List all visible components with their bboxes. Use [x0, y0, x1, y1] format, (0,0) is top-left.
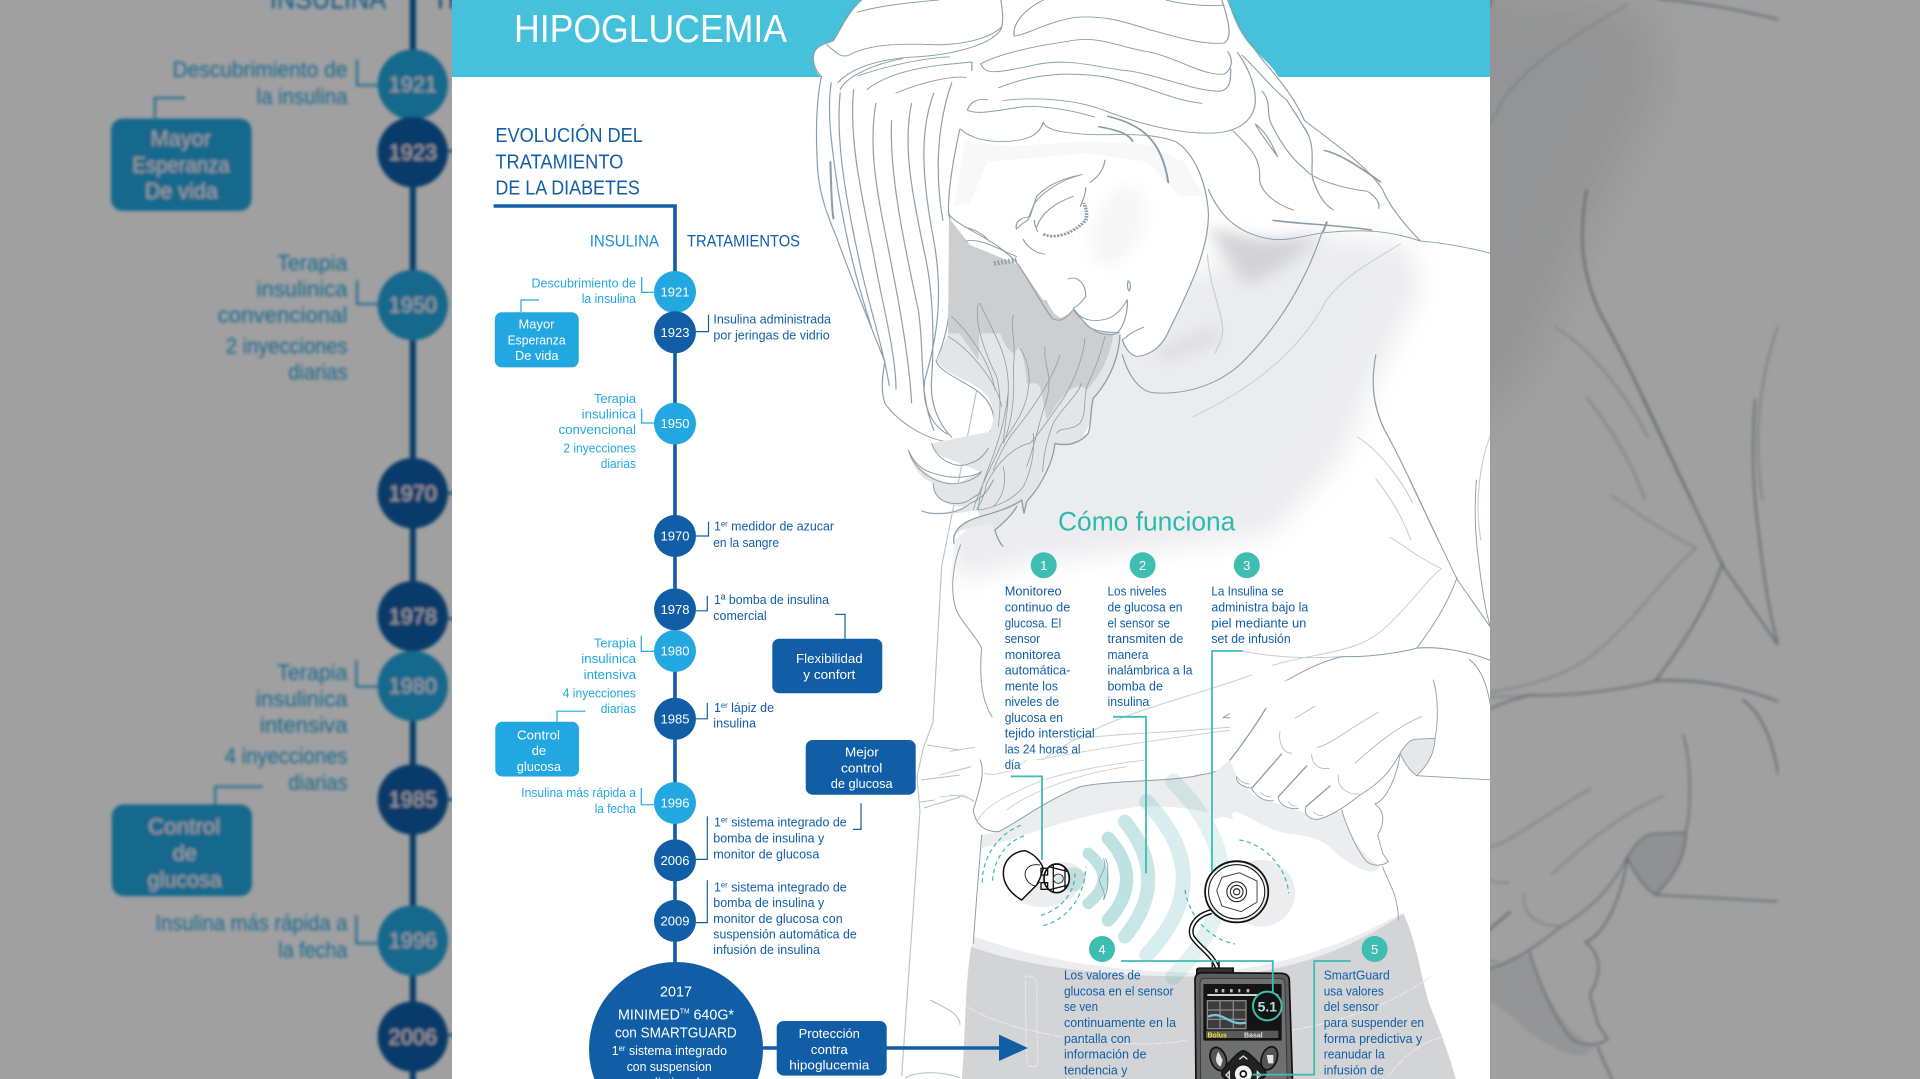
blurred enlarged background of the poster: 1923	[389, 140, 437, 165]
step 3: La Insulina se	[1211, 584, 1284, 599]
step 2: Los niveles	[1108, 584, 1167, 599]
step 2: 2	[1139, 558, 1146, 573]
blurred enlarged background of the poster: Terapia	[277, 251, 348, 276]
step 4: tendencia y	[1064, 1062, 1128, 1077]
signal waves	[1061, 782, 1222, 977]
node: 2017 minimed 640g: sistema integrado	[625, 1043, 727, 1058]
treatment labels: infusión de insulina	[713, 942, 821, 957]
box: control de glucosa	[495, 722, 579, 776]
year nodes: 1980	[661, 644, 689, 658]
header band	[452, 0, 1490, 77]
insulin labels: la fecha	[595, 801, 637, 816]
box: mejor control de glucosa	[806, 740, 916, 795]
step 1: glucosa. El	[1005, 615, 1061, 630]
blurred enlarged background of the poster: la insulina	[257, 84, 348, 109]
blurred enlarged background of the poster: insulinica	[257, 276, 348, 301]
box: mayor esperanza de vida	[495, 312, 579, 367]
blurred enlarged background of the poster: convencional	[218, 302, 348, 327]
pants stitching	[968, 976, 1441, 1076]
arrow to how-it-works	[763, 1035, 1028, 1061]
insulin pump	[1195, 960, 1293, 1079]
step 5: para suspender en	[1324, 1015, 1424, 1030]
pump screen readouts	[1208, 998, 1277, 1040]
column heading: tratamientos: TRATAMIENTOS	[687, 232, 800, 250]
treatment labels: 1	[714, 519, 721, 534]
step 4: pantalla con	[1064, 1031, 1131, 1046]
box: protección contra hipoglucemia: hipoglucemia	[789, 1057, 870, 1072]
heading: evolución del tratamiento: DE LA DIABETES	[495, 178, 640, 200]
blurred enlarged background of the poster: 1950	[389, 292, 437, 317]
insulin labels: insulinica	[581, 651, 637, 666]
year nodes: 1978	[661, 602, 689, 617]
blurred enlarged background of the poster: 1970	[389, 481, 437, 506]
blurred enlarged background of the poster: Descubrimiento de	[172, 57, 347, 82]
blurred enlarged background of the poster: 1978	[389, 604, 437, 629]
heading: evolución del tratamiento: EVOLUCIÓN DEL	[495, 124, 643, 147]
step 4: Los valores de	[1064, 968, 1140, 983]
insulin labels: 4 inyecciones	[563, 685, 636, 700]
step 1: las 24 horas al	[1005, 741, 1081, 756]
insulin labels: la insulina	[582, 291, 637, 306]
box: control de glucosa: glucosa	[517, 759, 562, 774]
neck, collar and shoulder	[1122, 189, 1438, 540]
insulin labels: diarias	[601, 456, 636, 471]
step 4: 4	[1098, 942, 1106, 957]
torso, belly and pants	[950, 480, 1490, 1079]
column heading: insulina: INSULINA	[590, 232, 660, 250]
blurred enlarged background of the poster: 4 inyecciones	[225, 744, 348, 769]
treatment labels: bomba de insulina y	[713, 830, 825, 846]
box: mayor esperanza de vida: Mayor	[518, 317, 555, 332]
blurred enlarged background of the poster: insulinica	[256, 686, 348, 711]
step 5: del sensor	[1324, 999, 1379, 1014]
year nodes: 2009	[661, 913, 689, 928]
heading: evolución del tratamiento: TRATAMIENTO	[495, 151, 623, 173]
node: 2017 minimed 640g: 2017	[660, 984, 692, 1000]
step 5: usa valores	[1324, 983, 1384, 998]
blurred enlarged background of the poster: 2 inyecciones	[226, 333, 348, 358]
step 1: sensor	[1005, 631, 1041, 646]
neck shadow	[1208, 227, 1322, 286]
blurred enlarged background of the poster: la fecha	[278, 937, 348, 962]
step 1: continuo de	[1005, 600, 1070, 614]
hair and face	[813, 0, 1490, 443]
face fill	[1120, 270, 1196, 356]
step 4: continuamente en la	[1064, 1015, 1177, 1030]
lower hair strands	[908, 300, 1120, 546]
year nodes: 1970	[661, 528, 689, 544]
box: flexibilidad y confort: Flexibilidad	[796, 651, 863, 666]
box: protección contra hipoglucemia: Protección	[799, 1026, 860, 1041]
step 3	[1211, 552, 1309, 646]
blurred enlarged background of the poster: Mayor	[151, 126, 211, 151]
hair outline	[813, 0, 1490, 253]
year nodes: 1923	[661, 325, 689, 340]
belly shadow	[982, 770, 1233, 848]
box: mejor control de glucosa: de glucosa	[831, 776, 893, 791]
hand and waist	[1213, 680, 1493, 927]
glucose reading ring	[1253, 992, 1282, 1020]
step 5: infusión de	[1324, 1062, 1384, 1077]
shirt shading	[940, 235, 1420, 580]
face features	[949, 116, 1490, 540]
box: mejor control de glucosa: control	[841, 761, 882, 776]
insulin labels	[521, 275, 637, 816]
node: 2017 minimed 640g: con suspension	[627, 1059, 712, 1074]
step 2: bomba de	[1108, 678, 1163, 693]
infusion set	[1191, 861, 1268, 971]
illustration: woman with insulin pump	[800, 0, 1493, 1079]
blurred enlarged background of the poster: 1980	[389, 673, 437, 698]
step 2: el sensor se	[1108, 615, 1170, 630]
treatment labels: suspensión automática de	[713, 926, 857, 941]
treatment labels: er	[721, 520, 728, 529]
pants band	[971, 914, 1406, 980]
insulin labels: Terapia	[594, 636, 637, 650]
sleeve shadow patch	[1400, 738, 1435, 776]
treatment labels: 1ª bomba de insulina	[714, 592, 830, 607]
year nodes: 1921	[661, 284, 689, 300]
blurred enlarged background of the poster: intensiva	[260, 712, 348, 737]
white mask left of hair edge	[942, 322, 1104, 566]
treatment labels: bomba de insulina y	[713, 895, 825, 910]
back of hand top	[1416, 648, 1417, 649]
blurred enlarged background of the poster: Insulina más rápida a	[155, 910, 348, 935]
strand fill	[908, 333, 1120, 546]
treatment labels: sistema integrado de	[728, 879, 847, 894]
step 5	[1324, 936, 1424, 1077]
treatment labels: comercial	[713, 608, 767, 623]
insulin labels: intensiva	[584, 667, 637, 682]
blurred enlarged background of the poster: de	[173, 840, 197, 865]
treatment labels: insulina	[713, 716, 757, 731]
treatment labels: 1	[714, 815, 721, 830]
blurred enlarged background of the poster: Control	[148, 814, 220, 839]
arm and side outlines	[902, 390, 977, 1078]
insulin labels: 2 inyecciones	[563, 440, 636, 455]
step 2: inalámbrica a la	[1108, 663, 1193, 678]
treatment labels: 1	[714, 700, 721, 715]
box: flexibilidad y confort	[772, 639, 882, 693]
poster panel background	[452, 0, 1490, 1079]
pump screen readouts: Basal	[1244, 1032, 1263, 1040]
under-hair shadow	[948, 218, 1118, 345]
insulin labels: convencional	[558, 422, 636, 437]
box: protección contra hipoglucemia	[777, 1021, 887, 1076]
step 4: glucosa en el sensor	[1064, 983, 1174, 998]
year nodes	[654, 271, 696, 942]
treatment labels: por jeringas de vidrio	[713, 327, 830, 342]
step 4	[1064, 936, 1177, 1077]
insulin labels: insulinica	[582, 406, 637, 421]
treatment labels: 1	[714, 879, 721, 894]
step 2	[1108, 552, 1193, 709]
step 1: monitorea	[1005, 647, 1061, 662]
step 2: de glucosa en	[1108, 600, 1182, 614]
box: control de glucosa: de	[532, 743, 546, 758]
treatment labels: er	[721, 701, 728, 710]
step 2: insulina	[1108, 694, 1150, 709]
step 1: automática-	[1005, 663, 1070, 678]
node: 2017 minimed 640g: TM	[680, 1008, 690, 1016]
node: 2017 minimed 640g	[589, 962, 763, 1079]
blurred enlarged background of the poster: De vida	[145, 179, 219, 204]
blurred enlarged background of the poster: diarias	[288, 359, 348, 384]
step 1: Monitoreo	[1005, 584, 1062, 599]
belly, sensor and waves	[940, 760, 1235, 977]
pump screen readouts: 5.1	[1258, 998, 1277, 1014]
treatment labels: monitor de glucosa	[713, 846, 820, 861]
insulin labels: Insulina más rápida a	[521, 785, 637, 800]
step 5: forma predictiva y	[1324, 1031, 1423, 1046]
lifted shirt hem	[980, 760, 1043, 816]
step 1: niveles de	[1005, 694, 1059, 709]
step 3: piel mediante un	[1211, 615, 1306, 630]
timeline axis	[494, 206, 675, 970]
year nodes: 2006	[661, 853, 689, 868]
blurred enlarged background of the poster: Terapia	[277, 660, 348, 685]
step 1: día	[1005, 757, 1021, 772]
blurred enlarged background of the poster: diarias	[288, 770, 348, 795]
box: mayor esperanza de vida: Esperanza	[508, 332, 566, 347]
step 1: 1	[1040, 558, 1047, 573]
treatment labels: en la sangre	[713, 535, 779, 550]
pump screen readouts: Bolus	[1208, 1032, 1227, 1040]
node: 2017 minimed 640g: con SMARTGUARD	[615, 1024, 737, 1041]
heading: cómo funciona: Cómo funciona	[1058, 506, 1236, 536]
blurred enlarged background of the poster: glucosa	[148, 867, 223, 892]
step 1: tejido intersticial	[1005, 726, 1095, 741]
dashed signal arcs	[982, 824, 1235, 944]
closed eyes	[965, 160, 1105, 257]
step 4: información de	[1064, 1047, 1146, 1062]
treatment labels: er	[721, 880, 728, 889]
step 5: SmartGuard	[1324, 968, 1390, 983]
treatment labels: sistema integrado de	[728, 815, 847, 830]
treatment labels: medidor de azucar	[728, 519, 835, 534]
step 1: mente los	[1005, 678, 1058, 693]
timeline connectors	[521, 277, 861, 923]
step 5: reanudar la	[1324, 1047, 1385, 1062]
insulin labels: Descubrimiento de	[532, 275, 636, 290]
step 5: 5	[1371, 942, 1378, 957]
step 1	[1005, 552, 1095, 772]
treatment labels: er	[721, 816, 728, 825]
treatment labels: Insulina administrada	[713, 312, 832, 327]
blurred enlarged background of the poster: Esperanza	[132, 153, 230, 178]
hand fill	[1230, 680, 1437, 819]
blurred enlarged background of the poster: 1921	[389, 72, 437, 97]
step 2: manera	[1108, 647, 1149, 662]
step 4: se ven	[1064, 999, 1098, 1014]
blurred enlarged background of the poster: 2006	[389, 1024, 437, 1049]
node: 2017 minimed 640g: MINIMED	[618, 1006, 683, 1024]
insulin labels: Terapia	[594, 391, 637, 406]
box: protección contra hipoglucemia: contra	[811, 1042, 849, 1057]
blurred enlarged background of the poster: 1985	[389, 787, 437, 812]
step 3: 3	[1243, 558, 1250, 573]
step 3: administra bajo la	[1211, 600, 1309, 614]
transmitter mark	[1099, 858, 1108, 900]
pants	[961, 914, 1459, 1079]
treatment labels: monitor de glucosa con	[713, 911, 843, 926]
heading: evolución del tratamiento	[495, 124, 643, 200]
shadow under hand	[1213, 760, 1380, 871]
step 2: transmiten de	[1108, 631, 1183, 646]
year nodes: 1985	[661, 711, 689, 726]
hair top cover on header band	[813, 0, 1279, 77]
glucose sensor	[1003, 851, 1069, 900]
node: 2017 minimed 640g: er	[619, 1044, 626, 1053]
title: HIPOGLUCEMIA	[514, 8, 787, 51]
node: 2017 minimed 640g: 640G*	[690, 1006, 734, 1024]
blurred enlarged background of the poster: 1996	[389, 928, 437, 953]
box: mejor control de glucosa: Mejor	[845, 745, 879, 760]
face shading	[1100, 196, 1136, 257]
insulin labels: diarias	[601, 701, 636, 716]
body outlines	[953, 545, 992, 717]
treatment labels	[713, 312, 857, 957]
step 1: glucosa en	[1005, 710, 1063, 725]
box: mayor esperanza de vida: De vida	[515, 348, 559, 363]
box: flexibilidad y confort: y confort	[803, 667, 856, 682]
step 3: set de infusión	[1211, 631, 1291, 646]
box: control de glucosa: Control	[517, 727, 560, 742]
year nodes: 1950	[661, 416, 689, 431]
treatment labels: lápiz de	[728, 700, 774, 715]
node: 2017 minimed 640g: 1	[612, 1043, 619, 1058]
year nodes: 1996	[661, 796, 689, 810]
teal leader lines	[1011, 651, 1351, 1075]
